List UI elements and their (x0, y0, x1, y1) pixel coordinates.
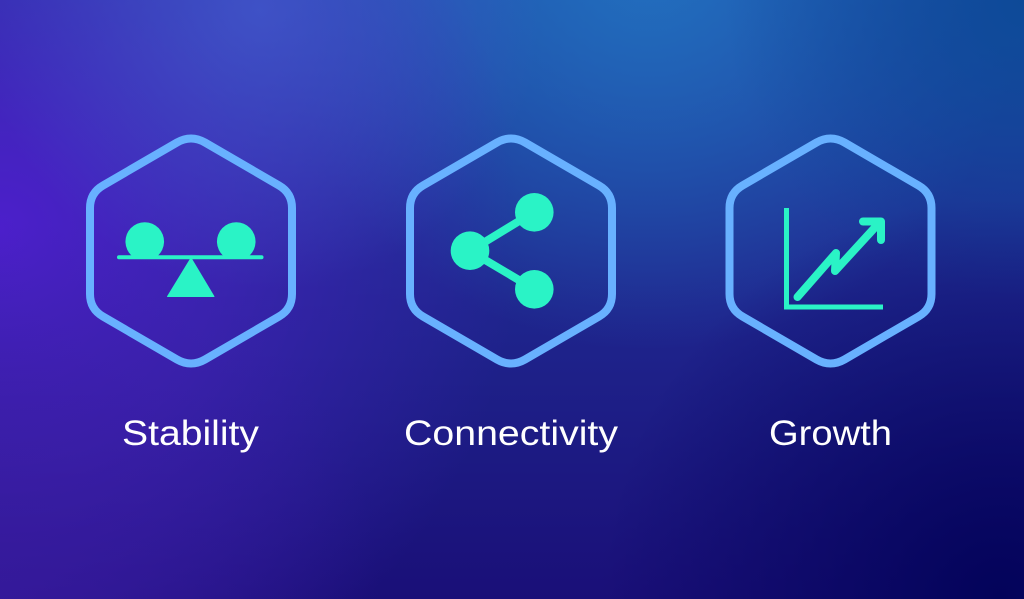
icon: growth chart (786, 208, 883, 307)
panel: stability (90, 138, 292, 453)
icon: share nodes (451, 193, 554, 309)
label: Connectivity: Connectivity (404, 414, 619, 453)
hexagon frame: stability (90, 138, 292, 364)
hexagon frame: connectivity (410, 138, 612, 364)
panel: connectivity (404, 138, 619, 453)
label: Stability: Stability (122, 414, 260, 453)
panel: growth (730, 138, 932, 453)
icon: balance scale (117, 222, 264, 296)
label: Growth: Growth (769, 414, 892, 453)
hexagon frame: growth (730, 138, 932, 364)
